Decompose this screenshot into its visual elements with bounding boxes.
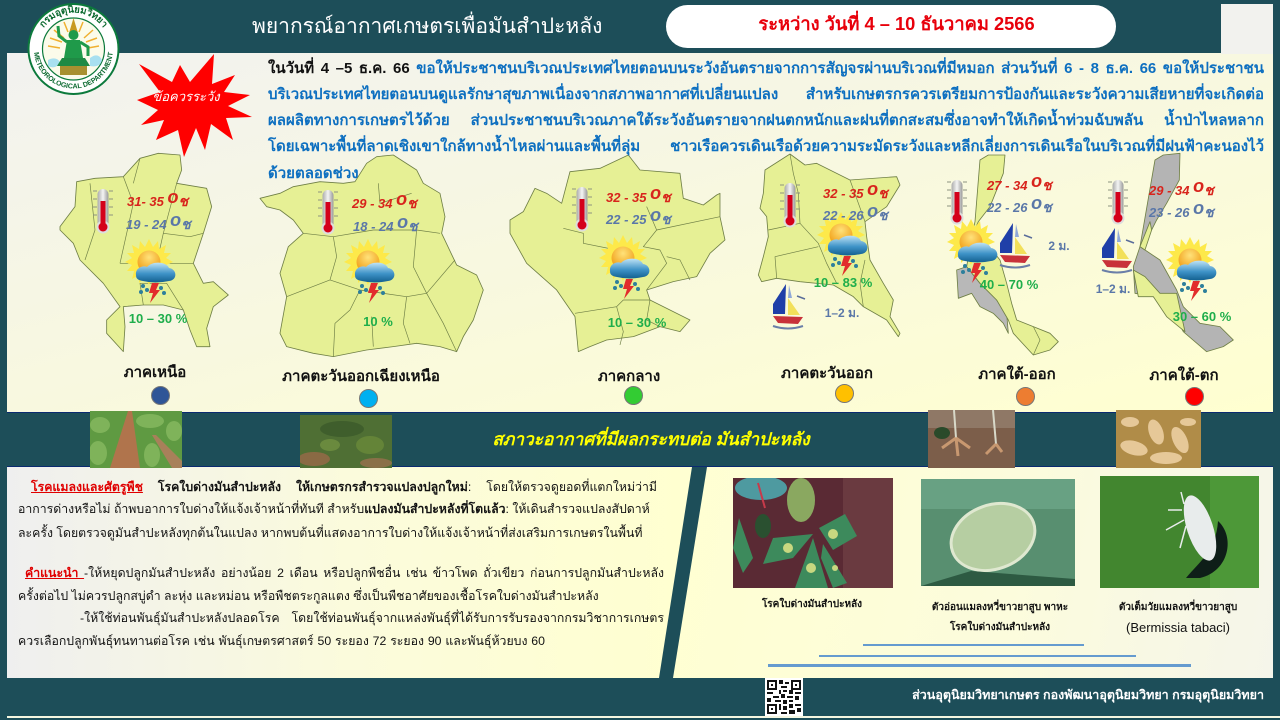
qr code (765, 678, 803, 716)
map: south east coast: ช (1042, 177, 1054, 193)
pest and disease text: ควรเลือกปลูกพันธุ์ทนทานต่อโรค เช่น พันธุ์เกษตรศาสตร์ 50 ระยอง 72 ระยอง 90 และพันธุ์ห้วยบง 60 (18, 634, 545, 648)
region label: northeast: ภาคตะวันออกเฉียงเหนือ (282, 368, 440, 385)
advisory paragraph: ในวันที่ 4 –5 ธ.ค. 66 ขอให้ประชาชนบริเวณประเทศไทยตอนบนระวังอันตรายจากการสัญจรผ่านบริเวณที่มีหมอก ส่วนวันที่ 6 - 8 ธ.ค. 66 ขอให้ประชาชน (268, 60, 1264, 77)
advisory paragraph: ด้วยตลอดช่วง (268, 165, 359, 182)
map: central: 10 – 30 % (608, 315, 667, 330)
map: northeast: 18 - 24 (353, 219, 393, 234)
region label: east: ภาคตะวันออก (781, 365, 873, 382)
logo: meteorological department seal (28, 3, 120, 95)
map: central: 22 - 25 (606, 212, 646, 227)
caption: whitefly nymph (932, 599, 1068, 633)
regional forecast maps (60, 152, 1234, 357)
map: northeast: 10 % (363, 314, 393, 329)
logo: meteorological department seal: กรมอุตุนิยมวิทยา (40, 5, 106, 28)
map: east: o (867, 201, 878, 221)
map: north: 10 – 30 % (129, 311, 188, 326)
map: south east coast: o (1031, 171, 1042, 191)
map: east: 10 – 83 % (814, 275, 873, 290)
logo: meteorological department seal: METEOROLOGICAL DEPARTMENT (34, 52, 113, 88)
map: east: 22 - 26 (823, 208, 863, 223)
map: south west coast: o (1193, 198, 1204, 218)
region dot: central (624, 386, 643, 405)
pest and disease text: ละครั้ง โดยตรวจดูมันสำปะหลังทุกต้นในแปลง หากพบต้นที่แสดงอาการใบด่างให้แจ้งเจ้าหน้าที่ส่งเสริมการเกษตรในพื้นที่ (18, 526, 642, 540)
map: central: 32 - 35 (606, 190, 646, 205)
map: northeast: ช (408, 218, 420, 234)
lower left panel background (7, 467, 687, 678)
caption: mosaic disease: โรคใบด่างมันสำปะหลัง (762, 599, 862, 610)
map: south east coast: 22 - 26 (987, 200, 1027, 215)
lower right panel background (680, 467, 1273, 678)
map: south east coast: 2 ม. (1048, 239, 1070, 253)
slanted divider (659, 467, 707, 678)
map: south west coast: 30 – 60 % (1173, 309, 1232, 324)
map: south west coast (1096, 153, 1233, 352)
photo: diseased cassava root (928, 410, 1015, 468)
title: พยากรณ์อากาศเกษตรเพื่อมันสำปะหลัง (252, 15, 602, 38)
map: east: 32 - 35 (823, 186, 863, 201)
region dot: northeast (359, 389, 378, 408)
map: south west coast: 1–2 ม. (1096, 282, 1130, 296)
map: north (60, 153, 228, 352)
pest and disease text: อาการด่างหรือไม่ ถ้าพบอาการใบด่างให้แจ้งเจ้าหน้าที่ทันที สำหรับแปลงมันสำปะหลังที่โตแล้ว: ให้เดินสำรวจแปลงสัปดาห์ (18, 502, 650, 516)
decorative rule lines (768, 644, 1191, 667)
map: north: ช (181, 216, 193, 232)
region label: south east coast: ภาคใต้-ออก (978, 366, 1056, 383)
map: east: ช (878, 185, 890, 201)
map: northeast: 29 - 34 (352, 196, 392, 211)
photo: whitefly nymph (921, 479, 1075, 586)
top right panel notch (1221, 4, 1273, 54)
region dot: north (151, 386, 170, 405)
pest and disease text (18, 478, 664, 648)
pest and disease text: คำแนะนำ -ให้หยุดปลูกมันสำปะหลัง อย่างน้อย 2 เดือน หรือปลูกพืชอื่น เช่น ข้าวโพด ถั่วเขียว ก่อนการปลูกมันสำปะหลัง (25, 566, 664, 580)
photo: adult whitefly (1100, 476, 1259, 588)
region label: central: ภาคกลาง (598, 368, 660, 385)
advisory paragraph: ผลผลิตทางการเกษตรไว้ด้วย ส่วนประชาชนบริเวณภาคใต้ระวังอันตรายจากฝนตกหนักและฝนที่ตกสะสมซึ่งอาจทำให้เกิดน้ำท่วมฉับพลัน น้ำป่าไหลหลาก (268, 112, 1264, 129)
map: south east coast: ช (1042, 199, 1054, 215)
region dot: south west coast (1185, 387, 1204, 406)
date pill (666, 5, 1116, 48)
map: south east coast: 27 - 34 (987, 178, 1027, 193)
warning star (137, 54, 252, 157)
map: northeast (260, 155, 483, 357)
map: central (510, 155, 725, 352)
advisory paragraph: บริเวณประเทศไทยตอนบนดูแลรักษาสุขภาพเนื่องจากสภาพอากาศที่เปลี่ยนแปลง สำหรับเกษตรกรควรเตรียมการป้องกันและระวังความเสียหายที่จะเกิดต่อ (268, 86, 1264, 103)
footer agency text: ส่วนอุตุนิยมวิทยาเกษตร กองพัฒนาอุตุนิยมวิทยา กรมอุตุนิยมวิทยา (912, 688, 1264, 702)
map: central: ช (661, 211, 673, 227)
pest and disease text: -ให้ใช้ท่อนพันธุ์มันสำปะหลังปลอดโรค โดยใช้ท่อนพันธุ์จากแหล่งพันธุ์ที่ได้รับการรับรองจากกรมวิชาการเกษตร (80, 611, 664, 625)
photo: cassava canopy (300, 415, 392, 468)
map: south west coast: o (1193, 176, 1204, 196)
photo: cassava mosaic leaves (733, 478, 893, 588)
map: central: ช (661, 189, 673, 205)
map: north: o (170, 210, 181, 230)
caption: whitefly nymph: ตัวอ่อนแมลงหวี่ขาวยาสูบ พาหะ (932, 602, 1068, 613)
map: north: 31- 35 (127, 194, 164, 209)
map: northeast: o (397, 212, 408, 232)
caption: adult whitefly: ตัวเต็มวัยแมลงหวี่ขาวยาสูบ (1119, 602, 1237, 613)
region label: south west coast: ภาคใต้-ตก (1149, 367, 1219, 384)
caption: adult whitefly: (Bermissia tabaci) (1126, 620, 1230, 635)
map: central: o (650, 183, 661, 203)
map: northeast: o (396, 189, 407, 209)
map: south east coast (947, 155, 1070, 355)
main upper panel background (7, 53, 1273, 413)
pest and disease text: โรคแมลงและศัตรูพืช โรคใบด่างมันสำปะหลัง ให้เกษตรกรสำรวจแปลงปลูกใหม่: โดยให้ตรวจดูยอดที่แตกใหม่ว่ามี (31, 480, 657, 494)
pest and disease text: ครั้งต่อไป ไม่ควรปลูกสบู่ดำ ละหุ่ง และหม่อน หรือพืชตระกูลแตง ซึ่งเป็นพืชอาศัยของเชื้อโรคใบด่างมันสำปะหลัง (18, 589, 599, 603)
map: central: o (650, 205, 661, 225)
map: east: ช (878, 207, 890, 223)
caption: whitefly nymph: โรคใบด่างมันสำปะหลัง (950, 622, 1050, 633)
section heading: สภาวะอากาศที่มีผลกระทบต่อ มันสำปะหลัง (492, 429, 810, 449)
caption: adult whitefly (1119, 599, 1237, 635)
map: east: 1–2 ม. (825, 306, 859, 320)
map: south east coast: 40 – 70 % (980, 277, 1039, 292)
map: south east coast: o (1031, 193, 1042, 213)
warning star: ข้อควรระวัง (152, 89, 221, 104)
photo: cassava field rows (90, 411, 182, 468)
advisory paragraph: โดยเฉพาะพื้นที่ลาดเชิงเขาใกล้ทางน้ำไหลผ่านและพื้นที่ลุ่ม ชาวเรือควรเดินเรือด้วยความระมัดระวังและหลีกเลี่ยงการเดินเรือในบริเวณที่มีฝนฟ้าคะนองไว้ (268, 138, 1264, 155)
region label: north: ภาคเหนือ (124, 364, 186, 381)
map: south west coast: 23 - 26 (1149, 205, 1189, 220)
region dot: south east coast (1016, 387, 1035, 406)
map: north: o (167, 187, 178, 207)
map: north: ช (178, 193, 190, 209)
section band (7, 412, 1273, 467)
map: east: o (867, 179, 878, 199)
map: northeast: ช (407, 195, 419, 211)
advisory paragraph (268, 57, 1264, 182)
map: south west coast: ช (1204, 182, 1216, 198)
date pill: ระหว่าง วันที่ 4 – 10 ธันวาคม 2566 (758, 13, 1035, 34)
map: south west coast: ช (1204, 204, 1216, 220)
map: south west coast: 29 - 34 (1149, 183, 1189, 198)
photo: cassava tubers (1116, 410, 1201, 468)
region dot: east (835, 384, 854, 403)
map: east (758, 154, 900, 337)
footer base line (7, 716, 1280, 718)
map: north: 19 - 24 (126, 217, 166, 232)
